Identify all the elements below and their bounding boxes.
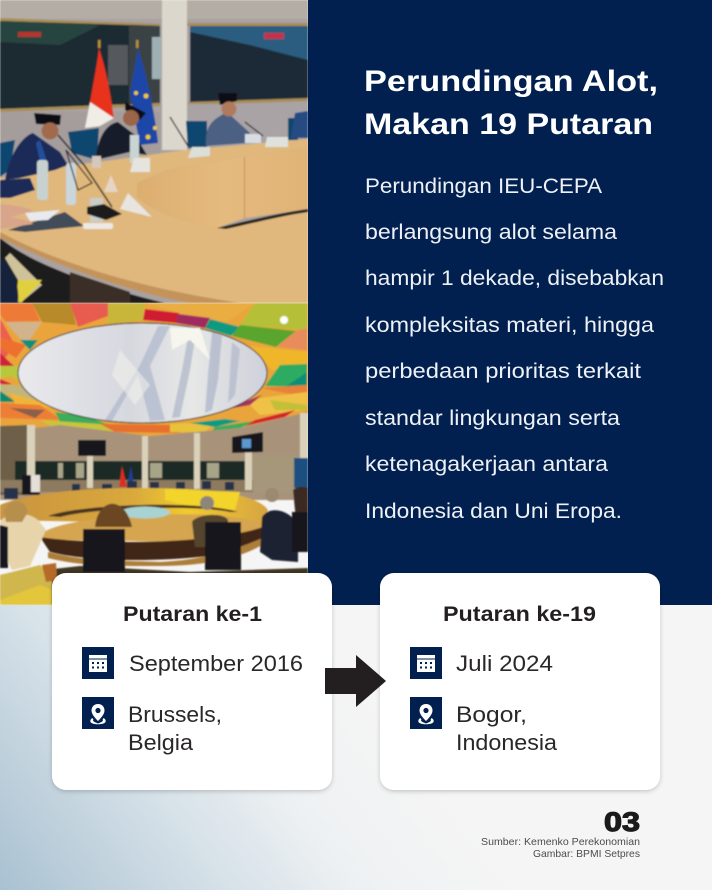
brown bag <box>42 563 57 582</box>
flag: Indonesia <box>85 40 114 128</box>
card: Putaran ke-1: September 2016 <box>129 651 303 676</box>
body text: perbedaan prioritas terkait <box>365 360 641 383</box>
body text: standar lingkungan serta <box>365 407 620 430</box>
card: Putaran ke-1 <box>52 573 332 790</box>
body text: hampir 1 dekade, disebabkan <box>365 267 664 290</box>
photo: meeting with delegation at table <box>0 0 308 303</box>
ceiling <box>0 303 308 438</box>
body text: ketenagakerjaan antara <box>365 453 608 476</box>
card: Putaran ke-19: Putaran ke-19 <box>443 602 596 626</box>
lower left floor and legs <box>0 238 165 303</box>
near-side attendees <box>0 487 308 570</box>
flags and seated delegates at far side <box>4 466 234 499</box>
card: Putaran ke-19: Indonesia <box>456 730 558 755</box>
front curved table <box>0 197 308 303</box>
source credits <box>481 836 640 860</box>
icon: calendar <box>410 647 442 679</box>
icon: location pin <box>82 697 114 729</box>
EU banner <box>294 458 308 488</box>
back wall <box>0 412 308 500</box>
body text: berlangsung alot selama <box>365 221 617 244</box>
table items <box>0 117 288 232</box>
ceiling spotlight <box>280 316 288 324</box>
source credits: Gambar: BPMI Setpres <box>533 848 640 860</box>
card: Putaran ke-19: Juli 2024 <box>456 651 553 676</box>
body text: kompleksitas materi, hingga <box>365 314 654 337</box>
title <box>364 65 658 141</box>
icon: location pin <box>410 697 442 729</box>
round table <box>0 488 268 566</box>
card: Putaran ke-19: Bogor, <box>456 702 527 727</box>
skylight <box>18 322 268 424</box>
icon: calendar <box>82 647 114 679</box>
title: Perundingan Alot, <box>364 65 658 98</box>
body text: Perundingan IEU-CEPA <box>365 175 602 198</box>
body text <box>365 175 664 523</box>
delegates <box>0 93 308 198</box>
card: Putaran ke-19 <box>380 573 660 790</box>
panel: navy text panel <box>308 0 712 605</box>
back curved table <box>0 139 308 228</box>
flag: European Union <box>130 40 158 145</box>
card: Putaran ke-1: Putaran ke-1 <box>123 602 262 626</box>
card: Putaran ke-1: Brussels, <box>128 702 222 727</box>
title: Makan 19 Putaran <box>364 108 653 141</box>
source credits: Sumber: Kemenko Perekonomian <box>481 836 640 848</box>
chairs <box>0 118 298 177</box>
floor <box>51 565 308 605</box>
photo: round table conference room with colourful ceiling <box>0 303 308 605</box>
black chairs <box>0 512 308 572</box>
page number: 03 <box>604 807 640 837</box>
wall screens <box>78 432 263 456</box>
arrow <box>325 655 386 707</box>
body text: Indonesia dan Uni Eropa. <box>365 500 622 523</box>
card: Putaran ke-1: Belgia <box>128 730 194 755</box>
